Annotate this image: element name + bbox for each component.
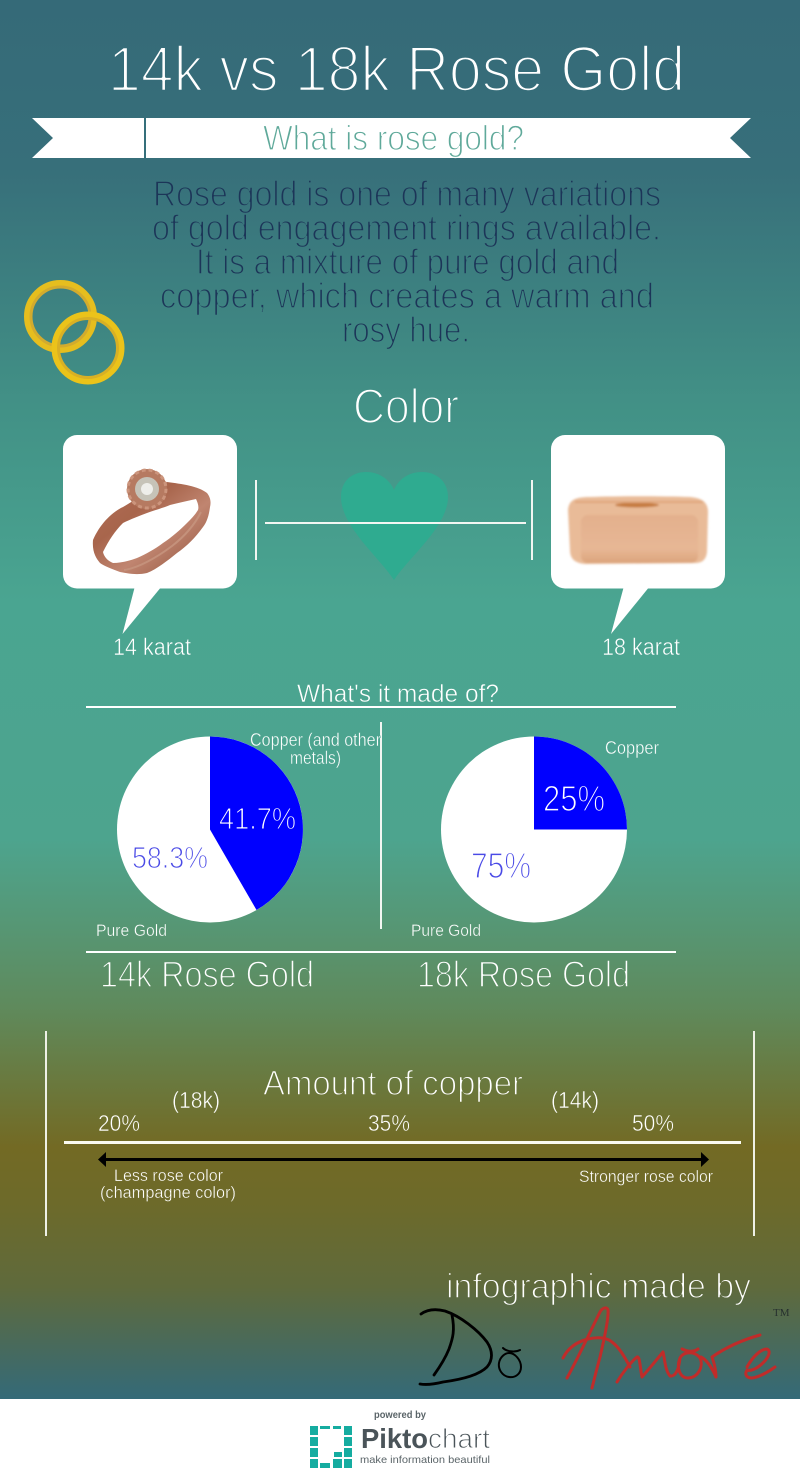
label: 14 karat: 14 karat [113,634,191,661]
icon: heart [341,472,448,580]
speech bubble: 14 karat ring [63,435,237,634]
pie chart: 14k composition: Copper (and other [250,730,381,750]
pie chart: 14k composition: metals) [290,748,341,768]
label: 18k rose gold: 18k Rose Gold [417,954,630,995]
intro paragraph: It is a mixture of pure gold and [196,241,619,282]
panel: amount of copper scale [45,1031,755,1236]
footer: piktochart branding: chart [428,1423,490,1454]
footer: piktochart branding: Pikto [361,1423,428,1454]
pie chart: 18k composition: 75% [471,845,531,886]
panel: amount of copper scale: (18k) [172,1087,220,1113]
label: 14k rose gold: 14k Rose Gold [100,954,314,995]
footer: piktochart branding: powered by [374,1409,426,1421]
footer: piktochart branding [0,1399,800,1479]
speech bubble: 18 karat ring [551,435,725,634]
icon: rose gold diamond ring [93,469,211,574]
trademark mark: TM [773,1307,790,1319]
logo: Do Amore signature [420,1308,775,1388]
arrow: double-headed scale [98,1152,709,1167]
panel: amount of copper scale: (champagne color) [100,1183,236,1202]
divider lines and heart [255,472,533,580]
title: 14k vs 18k Rose Gold [108,33,685,105]
panel: amount of copper scale: 20% [98,1110,140,1136]
pie chart: 18k composition: 25% [543,778,605,819]
pie chart: 18k composition [411,736,659,940]
pie chart: 14k composition: Pure Gold [96,921,167,940]
panel: amount of copper scale: Stronger rose color [579,1167,713,1186]
panel: amount of copper scale: 50% [632,1110,674,1136]
pie chart: 14k composition [96,730,381,940]
icon: piktochart logo [310,1426,352,1468]
intro paragraph: copper, which creates a warm and [160,275,654,316]
credit text: infographic made by [446,1267,751,1306]
pie chart: 18k composition: Copper [605,738,659,758]
panel: amount of copper scale: Less rose color [114,1166,223,1185]
footer: piktochart branding: make information beautiful [360,1454,490,1466]
intro paragraph: rosy hue. [342,309,470,350]
label: 18 karat: 18 karat [602,634,680,661]
intro paragraph [152,173,661,350]
panel: amount of copper scale: (14k) [551,1087,599,1113]
panel: amount of copper scale: Amount of copper [263,1064,523,1103]
intro paragraph: of gold engagement rings available. [152,207,661,248]
icon: rose gold band [568,496,708,564]
heading: color: Color [353,380,459,434]
heading: what's it made of: What's it made of? [297,680,499,708]
panel: amount of copper scale: 35% [368,1110,410,1136]
pie chart: 14k composition: 58.3% [132,840,208,875]
pie chart: 18k composition: Pure Gold [411,921,481,940]
ribbon banner: what is rose gold: What is rose gold? [263,119,524,158]
intro paragraph: Rose gold is one of many variations [153,173,661,214]
ribbon banner: what is rose gold [32,118,751,158]
pie chart: 14k composition: 41.7% [219,801,296,836]
icon: linked gold rings [28,284,120,380]
